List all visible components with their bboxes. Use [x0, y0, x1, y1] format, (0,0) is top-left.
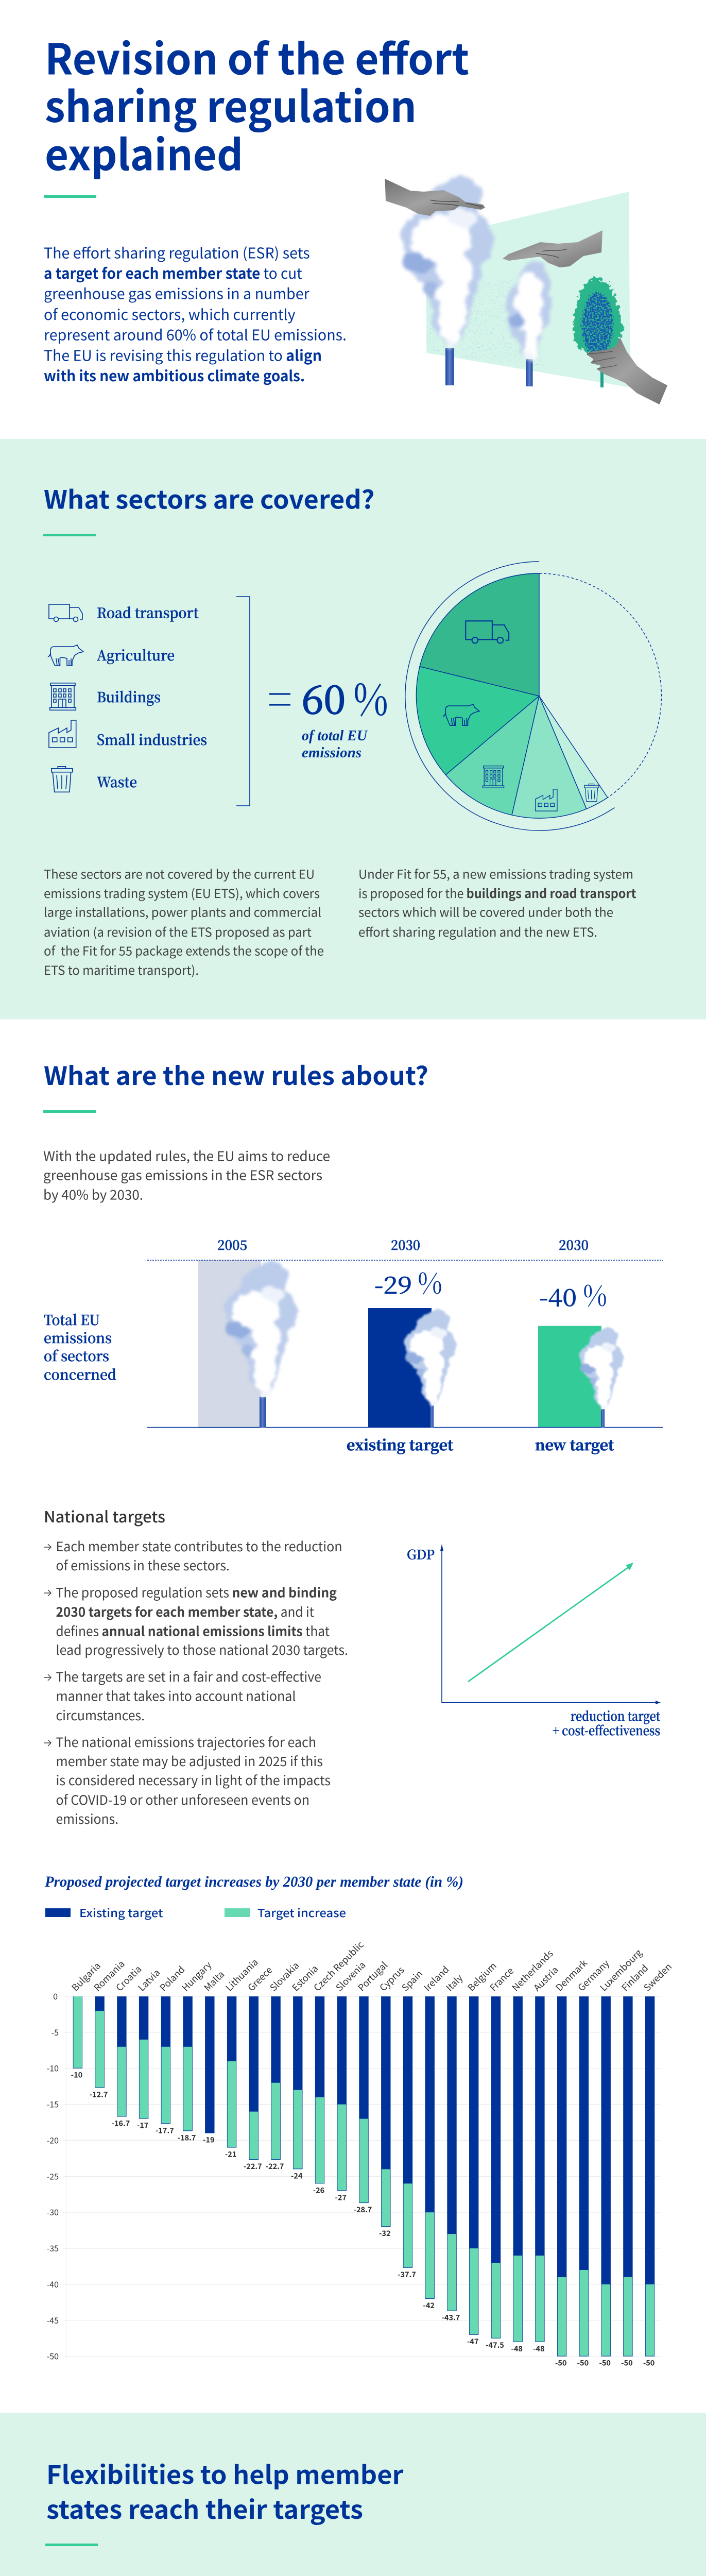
stacked bar chart: member states: -50 — [643, 2358, 655, 2368]
stacked bar chart: member states: -19 — [203, 2134, 215, 2145]
intro text: greenhouse gas emissions in a number — [44, 283, 310, 304]
label: total EU emissions — [44, 1309, 116, 1384]
stacked bar chart: member states: Denmark — [553, 1956, 590, 1994]
panel: new rules — [43, 1056, 675, 2368]
stacked bar chart: member states — [47, 1938, 675, 2368]
stacked bar chart: member states: -20 — [47, 2134, 59, 2146]
stacked bar chart: member states: -15 — [47, 2098, 59, 2110]
text: left column: of the Fit for 55 package extends the scope of the — [44, 941, 324, 959]
stacked bar chart: member states: Cyprus — [376, 1963, 407, 1994]
text: left column — [44, 864, 324, 978]
stacked bar chart: member states: Lithuania — [222, 1956, 261, 1994]
stacked bar chart: member states: -28.7 — [354, 2204, 372, 2215]
stacked bar chart: member states: -10 — [71, 2070, 82, 2080]
bullet list: member state may be adjusted in 2025 if this — [56, 1752, 323, 1770]
label: total EU emissions: Total EU — [44, 1309, 100, 1329]
text: right column: is proposed for the buildings and road transport — [358, 884, 636, 902]
stacked bar chart: member states: -47 — [467, 2336, 478, 2347]
equals sixty percent: 60 — [302, 669, 346, 725]
GDP chart: + cost-effectiveness — [553, 1721, 660, 1739]
stacked bar chart: member states: -21 — [225, 2148, 236, 2160]
text: right column: Under Fit for 55, a new emissions trading system — [358, 864, 633, 882]
stacked bar chart: member states: -50 — [599, 2358, 611, 2368]
text: left column: ETS to maritime transport). — [44, 960, 199, 978]
stacked bar chart: member states: -48 — [533, 2343, 545, 2354]
stacked bar chart: member states: -22.7 — [266, 2161, 284, 2172]
bullet list: lead progressively to those national 2030 targets. — [56, 1640, 348, 1659]
equals sixty percent: emissions — [302, 744, 361, 761]
stacked bar chart: member states: -26 — [313, 2184, 324, 2195]
stacked bar chart: member states: Portugal — [355, 1958, 390, 1994]
intro text — [44, 242, 347, 386]
icon: cow — [48, 645, 83, 666]
stacked bar chart: member states: Slovakia — [267, 1959, 302, 1994]
stacked bar chart: member states: Latvia — [135, 1966, 163, 1994]
bullet list: 2030 targets for each member state, and it — [56, 1602, 314, 1621]
stacked bar chart: member states: -35 — [47, 2242, 59, 2254]
stacked bar chart: member states: -24 — [291, 2170, 303, 2181]
bullet list: emissions. — [56, 1809, 118, 1828]
stacked bar chart: member states: Poland — [157, 1963, 187, 1994]
heading: What are the new rules about? — [44, 1056, 428, 1093]
stacked bar chart: member states: Belgium — [464, 1959, 499, 1994]
panel: what sectors are covered — [0, 439, 706, 1019]
stacked bar chart: member states: -45 — [47, 2314, 59, 2326]
heading: national targets: National targets — [44, 1504, 165, 1527]
intro text: a target for each member state to cut — [44, 262, 302, 283]
label: buildings: Buildings — [97, 686, 161, 706]
stacked bar chart: member states: -17 — [137, 2120, 148, 2131]
bullet list: circumstances. — [56, 1706, 145, 1724]
stacked bar chart: member states: Czech Republic — [311, 1938, 366, 1994]
title: Revision of the effort — [45, 25, 469, 87]
heading: states reach their targets — [46, 2490, 363, 2527]
intro text: of economic sectors, which currently — [44, 303, 296, 325]
label: total EU emissions: concerned — [44, 1363, 116, 1384]
stacked bar chart: member states: Netherlands — [509, 1947, 556, 1994]
bullet list: of COVID-19 or other unforeseen events on — [56, 1790, 309, 1809]
label: agriculture: Agriculture — [97, 644, 175, 665]
bullet list: The proposed regulation sets new and binding — [56, 1583, 337, 1601]
title: sharing regulation — [45, 73, 417, 134]
stacked bar chart: member states: Croatia — [113, 1962, 144, 1994]
stacked bar chart: member states: Luxembourg — [597, 1946, 645, 1994]
emissions bar chart: 2030 — [391, 1235, 420, 1254]
stacked bar chart: member states: -10 — [47, 2062, 59, 2074]
stacked bar chart: member states: -5 — [51, 2026, 59, 2038]
text: right column: sectors which will be covered under both the — [358, 903, 613, 921]
text: left column: emissions trading system (EU ETS), which covers — [44, 884, 320, 902]
stacked bar chart: member states: Bulgaria — [68, 1959, 104, 1994]
label: road transport: Road transport — [97, 602, 199, 622]
stacked bar chart: member states: -17.7 — [156, 2125, 174, 2136]
stacked bar chart: member states: -27 — [335, 2192, 347, 2202]
label: small industries: Small industries — [97, 728, 207, 749]
stacked bar chart: member states: Ireland — [421, 1963, 452, 1994]
icon: truck — [49, 604, 82, 621]
intro text: The effort sharing regulation (ESR) sets — [44, 242, 310, 263]
stacked bar chart: member states: -25 — [47, 2170, 59, 2182]
icon: building — [50, 683, 76, 710]
stacked bar chart: member states: -50 — [621, 2358, 633, 2368]
stacked bar chart: member states: -40 — [47, 2278, 59, 2290]
bracket — [236, 597, 250, 806]
intro text: greenhouse gas emissions in the ESR sectors — [43, 1165, 322, 1184]
emissions bar chart: -40 — [539, 1279, 577, 1313]
emissions bar chart: % — [583, 1274, 607, 1315]
stacked bar chart: member states: -18.7 — [178, 2132, 196, 2143]
GDP chart — [407, 1544, 661, 1739]
pie chart — [405, 562, 661, 831]
stacked bar chart: member states: -42 — [423, 2300, 435, 2311]
text: left column: large installations, power plants and commercial — [44, 903, 321, 921]
stacked bar chart: member states: Greece — [245, 1963, 275, 1994]
stacked bar chart: member states: -43.7 — [442, 2312, 460, 2323]
sector legend — [48, 602, 207, 792]
stacked bar chart: member states: Italy — [443, 1971, 466, 1994]
stacked bar chart: member states: 0 — [53, 1990, 58, 2002]
bullet list: defines annual national emissions limits that — [56, 1622, 330, 1640]
heading — [46, 2455, 404, 2527]
stacked bar chart: member states: France — [487, 1964, 516, 1994]
equals sixty percent: % — [353, 666, 388, 728]
intro text: with its new ambitious climate goals. — [44, 365, 305, 386]
intro text: The EU is revising this regulation to align — [44, 344, 322, 366]
panel: hero — [44, 25, 667, 404]
stacked bar chart: member states: Sweden — [641, 1960, 675, 1994]
emissions bar chart: existing target — [347, 1434, 453, 1455]
heading: What sectors are covered? — [44, 480, 375, 516]
emissions bar chart — [147, 1235, 663, 1455]
bullet list — [44, 1537, 348, 1828]
label: total EU emissions: of sectors — [44, 1345, 109, 1365]
text: left column: aviation (a revision of the ETS proposed as part — [44, 922, 312, 940]
stacked bar chart: member states: Austria — [530, 1963, 561, 1994]
title: explained — [45, 122, 243, 183]
chart title: Proposed projected target increases by 2030 per member state (in %) — [44, 1873, 463, 1890]
emissions bar chart: -29 — [374, 1267, 412, 1301]
chart legend — [45, 1904, 346, 1921]
text: left column: These sectors are not covered by the current EU — [44, 864, 315, 882]
text: right column — [358, 864, 636, 940]
stacked bar chart: member states: -32 — [379, 2228, 391, 2239]
bullet list: manner that takes into account national — [56, 1687, 296, 1705]
stacked bar chart: member states: Romania — [91, 1957, 127, 1994]
stacked bar chart: member states: Germany — [575, 1956, 612, 1994]
stacked bar chart: member states: -50 — [555, 2358, 566, 2368]
bullet list: The targets are set in a fair and cost-effective — [56, 1667, 321, 1686]
chart legend: Target increase — [257, 1904, 346, 1921]
emissions bar chart: new target — [535, 1434, 614, 1455]
emissions bar chart: 2030 — [559, 1235, 589, 1254]
stacked bar chart: member states: -12.7 — [90, 2089, 108, 2100]
bullet list: is considered necessary in light of the impacts — [56, 1771, 331, 1789]
bullet list: The national emissions trajectories for each — [56, 1733, 316, 1751]
stacked bar chart: member states: -30 — [47, 2206, 59, 2218]
illustration: smoke, hands and tree — [385, 175, 667, 404]
title — [45, 25, 469, 183]
bullet list: Each member state contributes to the reduction — [56, 1537, 342, 1555]
stacked bar chart: member states: -16.7 — [112, 2117, 130, 2128]
stacked bar chart: member states: Slovenia — [333, 1958, 368, 1994]
stacked bar chart: member states: Malta — [201, 1968, 227, 1994]
emissions bar chart: % — [418, 1261, 442, 1302]
label: waste: Waste — [97, 771, 137, 791]
stacked bar chart: member states: -22.7 — [244, 2161, 262, 2172]
text: right column: effort sharing regulation and the new ETS. — [358, 922, 597, 940]
stacked bar chart: member states: -48 — [511, 2343, 523, 2354]
stacked bar chart: member states: -37.7 — [398, 2269, 416, 2280]
stacked bar chart: member states: Spain — [399, 1967, 425, 1994]
icon: waste bin — [51, 767, 73, 792]
bullet list: of emissions in these sectors. — [56, 1556, 230, 1574]
heading: Flexibilities to help member — [46, 2455, 404, 2492]
stacked bar chart: member states: -50 — [577, 2358, 589, 2368]
GDP chart: reduction target — [571, 1706, 660, 1725]
intro text: represent around 60% of total EU emissions. — [44, 324, 347, 345]
label: total EU emissions: emissions — [44, 1327, 112, 1347]
stacked bar chart: member states: -50 — [47, 2350, 59, 2362]
stacked bar chart: member states: Hungary — [179, 1958, 214, 1994]
intro text: by 40% by 2030. — [43, 1184, 143, 1204]
equals sixty percent — [269, 666, 388, 761]
equals sixty percent: of total EU — [302, 727, 368, 744]
intro text: With the updated rules, the EU aims to reduce — [43, 1146, 330, 1165]
stacked bar chart: member states: -47.5 — [486, 2340, 504, 2350]
stacked bar chart: member states: Finland — [618, 1961, 651, 1994]
icon: factory — [49, 720, 76, 748]
intro text — [43, 1146, 330, 1204]
panel: flexibilities — [0, 2413, 706, 2576]
GDP chart: GDP — [407, 1545, 435, 1563]
chart legend: Existing target — [79, 1904, 163, 1921]
emissions bar chart: 2005 — [217, 1235, 247, 1254]
stacked bar chart: member states: Estonia — [289, 1962, 321, 1994]
